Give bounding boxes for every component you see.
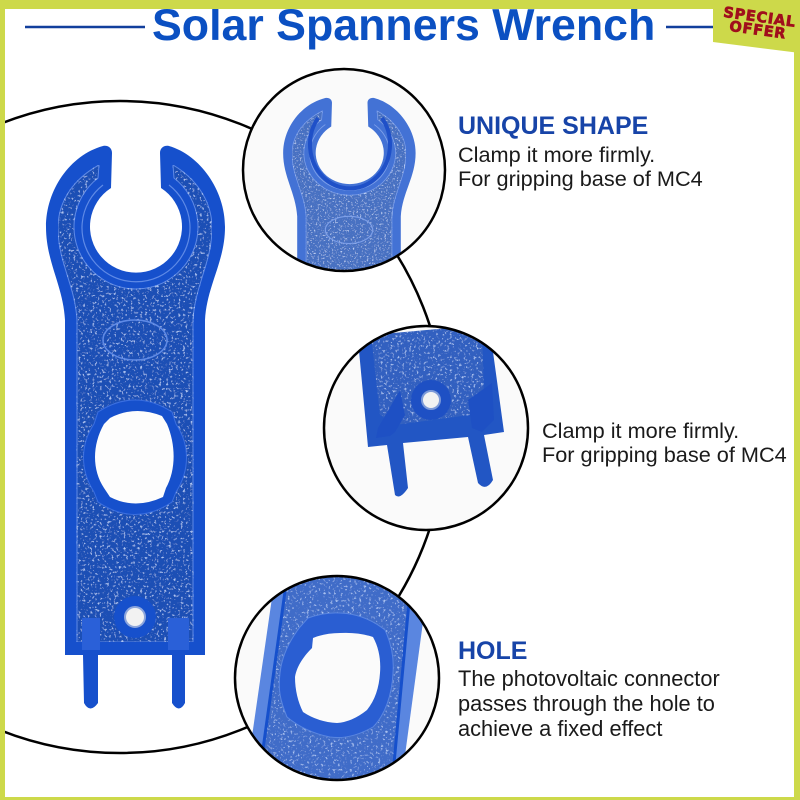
text block: hole <box>458 637 720 741</box>
special offer badge: SPECIAL <box>722 5 797 31</box>
large circle outline <box>0 101 446 753</box>
title: Solar Spanners Wrench <box>152 1 655 50</box>
text block: hole: achieve a fixed effect <box>458 716 662 741</box>
text block: unique shape: For gripping base of MC4 <box>458 166 703 191</box>
text block: clamp <box>542 418 787 467</box>
detail circle: hole <box>235 570 439 785</box>
main wrench <box>46 146 225 708</box>
detail circle: unique shape clamp <box>242 68 446 272</box>
text block: unique shape <box>458 112 703 191</box>
text block: unique shape: Clamp it more firmly. <box>458 142 655 167</box>
text block: clamp: Clamp it more firmly. <box>542 418 739 443</box>
special offer badge: OFFER <box>728 19 787 43</box>
text block: hole: The photovoltaic connector <box>458 666 720 691</box>
detail circle: pins and small hole <box>324 325 528 530</box>
text block: hole: passes through the hole to <box>458 691 715 716</box>
text block: unique shape: UNIQUE SHAPE <box>458 112 648 140</box>
text block: hole: HOLE <box>458 637 527 665</box>
text block: clamp: For gripping base of MC4 <box>542 442 787 467</box>
special offer badge <box>713 0 800 53</box>
